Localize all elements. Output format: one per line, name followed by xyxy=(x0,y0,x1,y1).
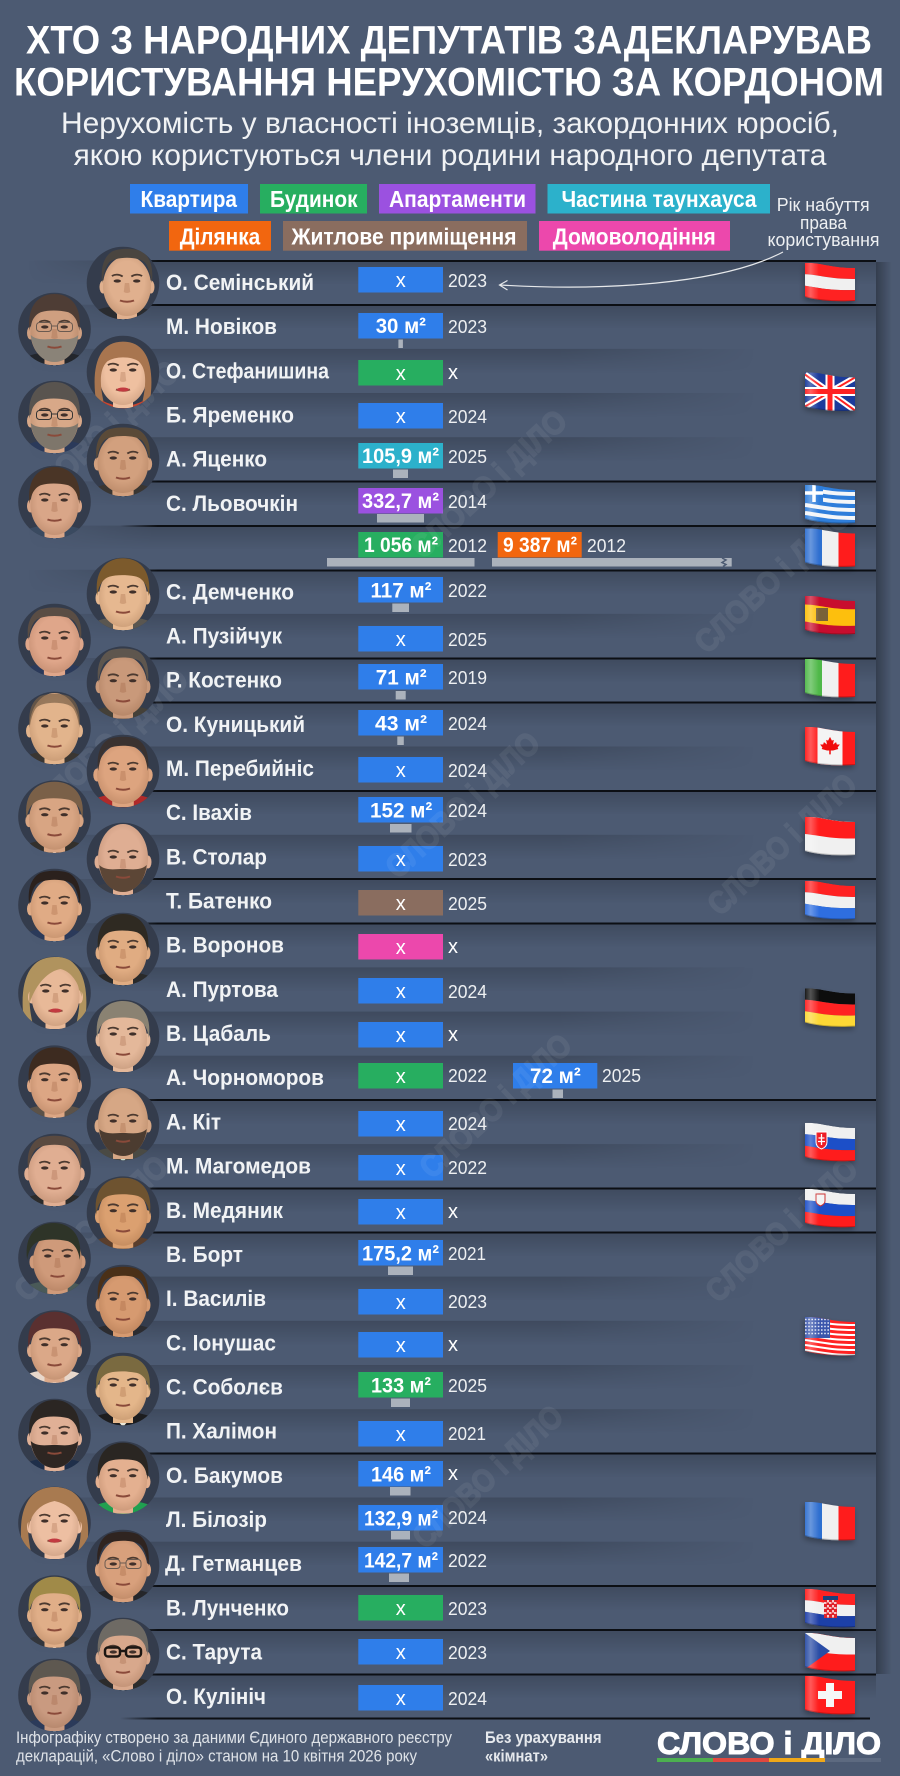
row: В. Медяник: х xyxy=(448,1201,458,1223)
row: С. Льовочкін xyxy=(166,488,487,522)
annotation: year of acquiring the right of use: права xyxy=(800,212,848,233)
portrait: Василів xyxy=(86,1264,160,1338)
portrait: Пузійчук xyxy=(18,604,91,676)
row: П. Халімон xyxy=(166,1419,486,1446)
row: П. Халімон: х xyxy=(396,1424,406,1446)
watermarks: СЛОВО і ДІЛО xyxy=(405,1398,570,1555)
row: М. Перебийніс: М. Перебийніс xyxy=(166,756,314,781)
row: В. Цабаль: х xyxy=(448,1024,458,1046)
row: В. Лунченко: х xyxy=(396,1598,406,1620)
row: С. Тарута: 2023 xyxy=(448,1642,487,1663)
row: Р. Костенко xyxy=(166,664,487,700)
flag: United States xyxy=(805,1317,855,1357)
row: А. Кіт xyxy=(166,1109,487,1136)
legend: апартаменти: Апартаменти xyxy=(389,186,526,212)
row: С. Іонушас: х xyxy=(448,1334,458,1356)
row: А. Пузійчук xyxy=(166,623,487,652)
row: О. Куницький: О. Куницький xyxy=(166,712,305,737)
row: В. Столар: х xyxy=(396,849,406,871)
row: Л. Білозір: Л. Білозір xyxy=(166,1507,267,1532)
legend: житлове приміщення: Житлове приміщення xyxy=(291,224,516,250)
flag: Canada xyxy=(805,727,855,767)
row: В. Лунченко xyxy=(166,1595,487,1620)
row: В. Воронов xyxy=(166,933,458,960)
watermarks: СЛОВО і ДІЛО xyxy=(18,353,186,513)
footer: note on rooms xyxy=(485,1729,602,1766)
row: І. Василів: х xyxy=(396,1292,406,1314)
row: Л. Білозір: 2024 xyxy=(448,1507,487,1528)
portrait: Лунченко xyxy=(18,1575,91,1648)
row: М. Магомедов: х xyxy=(396,1158,406,1180)
row: Б. Яременко xyxy=(166,402,487,428)
row: О. Кулініч: О. Кулініч xyxy=(166,1684,266,1709)
row: О. Стефанишина: х xyxy=(448,362,458,384)
portrait: Яременко xyxy=(18,380,91,454)
row: С. Льовочкін: 332,7 м² xyxy=(362,489,439,513)
flag: Croatia xyxy=(805,1589,855,1629)
row: Д. Гетманцев xyxy=(165,1547,487,1582)
flag: Czechia xyxy=(805,1633,855,1673)
row: Б. Яременко: х xyxy=(396,406,406,428)
row: С. Івахів: С. Івахів xyxy=(166,800,252,825)
row: С. Івахів: 152 м² xyxy=(370,798,432,822)
row: А. Пуртова: 2024 xyxy=(448,981,487,1002)
row: В. Столар: 2023 xyxy=(448,849,487,870)
flag: Slovenia xyxy=(805,1189,855,1229)
flag: United Kingdom xyxy=(805,372,855,412)
row: О. Куницький: 2024 xyxy=(448,713,487,734)
row: Л. Білозір xyxy=(166,1505,487,1540)
portrait: Семінський xyxy=(86,246,160,320)
row: М. Перебийніс: 2024 xyxy=(448,760,487,781)
row: О. Стефанишина: О. Стефанишина xyxy=(166,358,330,383)
subtitle: Нерухомість у власності іноземців, закордонних юросіб, xyxy=(61,107,839,140)
flag: Italy xyxy=(805,659,855,699)
row: С. Тарута xyxy=(166,1639,487,1665)
portrait: Батенко xyxy=(18,868,91,942)
footer: source note xyxy=(16,1729,453,1766)
portrait: Цабаль xyxy=(87,1000,159,1072)
watermarks: СЛОВО і ДІЛО xyxy=(698,1150,865,1309)
row: А. Пузійчук: х xyxy=(396,629,406,651)
row: С. Льовочкін: С. Льовочкін xyxy=(166,491,298,516)
row: В. Воронов: х xyxy=(396,937,406,959)
row: В. Борт: 175,2 м² xyxy=(362,1242,439,1266)
portrait: Перебийніс xyxy=(86,734,160,808)
row: С. Івахів: 2024 xyxy=(448,800,487,821)
portrait: Демченко xyxy=(86,558,160,630)
portrait: Соболєв xyxy=(86,1352,160,1426)
row: А. Яценко xyxy=(166,443,487,478)
portrait: Пуртова xyxy=(18,957,91,1029)
portrait: Стефанишина xyxy=(87,336,159,412)
flag: Slovakia xyxy=(805,1123,855,1163)
row: С. Демченко xyxy=(166,577,487,612)
portrait: Кіт xyxy=(86,1088,160,1160)
row: В. Медяник: В. Медяник xyxy=(166,1198,284,1223)
annotation: year of acquiring the right of use: користування xyxy=(768,229,880,250)
flag: Austria xyxy=(805,263,855,303)
row: С. Тарута: х xyxy=(396,1642,406,1664)
row: М. Перебийніс: х xyxy=(396,760,406,782)
portraits xyxy=(14,247,163,1735)
row: А. Кіт: х xyxy=(396,1114,406,1136)
row: О. Бакумов: О. Бакумов xyxy=(166,1463,283,1488)
row: В. Борт: В. Борт xyxy=(166,1242,243,1267)
row: Б. Яременко: Б. Яременко xyxy=(166,402,294,428)
row: Р. Костенко: Р. Костенко xyxy=(166,668,282,693)
row: О. Бакумов: х xyxy=(448,1463,458,1485)
portrait: Бакумов xyxy=(86,1441,160,1514)
subtitle: якою користуються члени родини народного депутата xyxy=(74,139,827,172)
row: С. Іонушас xyxy=(166,1330,458,1358)
row: Б. Яременко: 2024 xyxy=(448,406,487,427)
portrait: Білозір xyxy=(18,1487,91,1559)
watermarks: СЛОВО і ДІЛО xyxy=(7,1148,175,1308)
row: П. Халімон: 2021 xyxy=(448,1423,486,1444)
row: А. Чорноморов: х xyxy=(396,1066,406,1088)
row: В. Цабаль: В. Цабаль xyxy=(166,1021,271,1046)
watermarks xyxy=(7,353,865,1555)
row: М. Новіков: 30 м² xyxy=(376,314,426,338)
row: А. Пузійчук: 2025 xyxy=(448,629,487,650)
row: О. Куницький xyxy=(166,710,487,745)
row: В. Столар: В. Столар xyxy=(166,844,267,869)
row: Д. Гетманцев: Д. Гетманцев xyxy=(165,1551,302,1576)
row: О. Семінський: х xyxy=(396,270,406,292)
row: О. Семінський xyxy=(166,267,487,295)
row: А. Чорноморов: А. Чорноморов xyxy=(166,1065,324,1090)
row: С. Демченко: 117 м² xyxy=(370,578,432,602)
portrait: Столар xyxy=(86,822,160,896)
portrait: Гетманцев xyxy=(86,1530,160,1602)
row: А. Яценко: А. Яценко xyxy=(166,447,267,472)
row: С. Соболєв: С. Соболєв xyxy=(166,1374,283,1400)
row: О. Кулініч: х xyxy=(396,1688,406,1710)
row: О. Стефанишина xyxy=(166,358,458,386)
portrait: Новіков xyxy=(18,292,91,366)
row: О. Бакумов: 146 м² xyxy=(371,1462,431,1486)
flag: Germany xyxy=(805,988,855,1028)
flag: France xyxy=(805,1502,855,1542)
logo: Слово і діло: СЛОВО і ДІЛО xyxy=(657,1725,881,1761)
row: С. Демченко: 2022 xyxy=(448,580,487,601)
row: О. Семінський: О. Семінський xyxy=(166,270,314,295)
watermarks: СЛОВО і ДІЛО xyxy=(27,661,195,821)
row: В. Медяник xyxy=(166,1198,458,1224)
arrow: annotation to year xyxy=(500,252,783,290)
watermarks: СЛОВО і ДІЛО xyxy=(687,497,858,660)
portrait: Костенко xyxy=(86,646,160,719)
portrait: Тарута xyxy=(86,1618,160,1690)
row: В. Борт: 2021 xyxy=(448,1243,486,1264)
row: А. Пуртова xyxy=(166,977,487,1004)
row: М. Новіков: М. Новіков xyxy=(166,314,277,339)
row: Л. Білозір: 132,9 м² xyxy=(364,1506,438,1530)
subtitle xyxy=(61,107,839,172)
footer: note on rooms: Без урахування xyxy=(485,1729,602,1747)
row: С. Льовочкін, land and house in France xyxy=(327,532,732,566)
row: В. Лунченко: 2023 xyxy=(448,1598,487,1619)
row: А. Яценко: 2025 xyxy=(448,446,487,467)
portrait: Халімон xyxy=(18,1398,91,1472)
row: А. Яценко: 105,9 м² xyxy=(362,444,439,468)
row: А. Кіт: А. Кіт xyxy=(166,1109,221,1134)
portrait: Яценко xyxy=(86,424,160,496)
row: М. Новіков xyxy=(166,313,487,348)
row: В. Борт xyxy=(166,1240,486,1275)
annotation: year of acquiring the right of use: Рік набуття xyxy=(777,194,870,215)
row: В. Цабаль xyxy=(166,1021,458,1048)
watermarks: СЛОВО і ДІЛО xyxy=(403,402,574,565)
legend xyxy=(130,184,770,251)
row: В. Медяник: х xyxy=(396,1202,406,1224)
row: О. Бакумов xyxy=(166,1461,458,1496)
row: О. Семінський: 2023 xyxy=(448,270,487,291)
row: С. Соболєв xyxy=(166,1372,487,1407)
row: О. Стефанишина: х xyxy=(396,363,406,385)
legend: ділянка: Ділянка xyxy=(180,224,261,250)
row: С. Соболєв: 2025 xyxy=(448,1375,487,1396)
row: Р. Костенко: 2019 xyxy=(448,667,487,688)
row: А. Чорноморов: 72 м² xyxy=(530,1064,581,1088)
footer: note on rooms: «кімнат» xyxy=(485,1748,548,1766)
watermarks: СЛОВО і ДІЛО xyxy=(378,724,547,885)
row: С. Льовочкін, land and house in France: 9 387 м² xyxy=(503,533,577,557)
row: О. Кулініч xyxy=(166,1684,487,1710)
legend: частина таунхауса: Частина таунхауса xyxy=(562,186,757,212)
flag: Spain xyxy=(805,596,855,636)
portrait: Воронов xyxy=(86,912,160,986)
row: С. Івахів xyxy=(166,797,487,832)
row: С. Льовочкін, land and house in France: 2012 xyxy=(587,535,626,556)
row: С. Демченко: С. Демченко xyxy=(166,579,294,604)
legend: домоволодіння: Домоволодіння xyxy=(553,224,716,250)
flag: France xyxy=(805,528,855,568)
row: А. Пуртова: А. Пуртова xyxy=(166,977,279,1002)
row: І. Василів xyxy=(166,1286,487,1314)
row: А. Кіт: 2024 xyxy=(448,1113,487,1134)
flag: Greece xyxy=(805,485,855,525)
row: О. Кулініч: 2024 xyxy=(448,1688,487,1709)
portrait: Магомедов xyxy=(18,1134,91,1206)
row: В. Столар xyxy=(166,844,487,872)
row: А. Чорноморов: 2022 xyxy=(448,1065,487,1086)
row: Д. Гетманцев: 142,7 м² xyxy=(364,1548,438,1572)
portrait: Куницький xyxy=(18,692,91,764)
flag: Monaco / Indonesia xyxy=(805,817,855,857)
row: І. Василів: 2023 xyxy=(448,1291,487,1312)
portrait: Івахів xyxy=(18,780,91,853)
row: С. Тарута: С. Тарута xyxy=(166,1640,263,1665)
portrait: Льовочкін xyxy=(18,466,91,538)
watermarks: СЛОВО і ДІЛО xyxy=(700,766,864,922)
legend: будинок: Будинок xyxy=(270,186,358,212)
flags xyxy=(805,263,855,1716)
row: М. Новіков: 2023 xyxy=(448,316,487,337)
watermarks: СЛОВО і ДІЛО xyxy=(412,1026,579,1185)
row: С. Льовочкін, land and house in France: 2012 xyxy=(448,535,487,556)
table of deputies xyxy=(165,267,732,1710)
row: Д. Гетманцев: 2022 xyxy=(448,1550,487,1571)
portrait: Медяник xyxy=(86,1176,160,1249)
portrait: Кулініч xyxy=(18,1658,91,1732)
row: О. Куницький: 43 м² xyxy=(375,712,427,736)
row: А. Пузійчук: А. Пузійчук xyxy=(166,623,283,648)
row: В. Цабаль: х xyxy=(396,1025,406,1047)
row: С. Іонушас: х xyxy=(396,1335,406,1357)
row: С. Льовочкін: 2014 xyxy=(448,491,487,512)
portrait: Іонушас xyxy=(18,1310,91,1383)
row: Т. Батенко: Т. Батенко xyxy=(166,888,272,914)
row: Т. Батенко xyxy=(166,888,487,916)
row: М. Магомедов: М. Магомедов xyxy=(166,1154,311,1179)
row: П. Халімон: П. Халімон xyxy=(166,1419,277,1444)
row: С. Соболєв: 133 м² xyxy=(371,1374,431,1398)
row: М. Магомедов xyxy=(166,1154,487,1180)
row: А. Чорноморов xyxy=(166,1063,641,1098)
flag: Switzerland xyxy=(805,1676,855,1716)
row: І. Василів: І. Василів xyxy=(166,1286,266,1311)
row: С. Льовочкін, land and house in France: 1 056 м² xyxy=(364,533,438,557)
row: В. Лунченко: В. Лунченко xyxy=(166,1595,289,1620)
row: Т. Батенко: х xyxy=(396,893,406,915)
annotation: year of acquiring the right of use xyxy=(768,194,880,250)
footer: source note: Інфографіку створено за даними Єдиного державного реєстру xyxy=(16,1729,453,1747)
row: С. Іонушас: С. Іонушас xyxy=(166,1330,276,1355)
row: М. Магомедов: 2022 xyxy=(448,1157,487,1178)
row: Р. Костенко: 71 м² xyxy=(376,666,427,690)
flag: Netherlands xyxy=(805,881,855,921)
row: А. Чорноморов: 2025 xyxy=(602,1065,641,1086)
row: А. Пуртова: х xyxy=(396,981,406,1003)
row: В. Воронов: х xyxy=(448,936,458,958)
row: Т. Батенко: 2025 xyxy=(448,893,487,914)
legend: квартира: Квартира xyxy=(140,186,238,212)
row: М. Перебийніс xyxy=(166,756,487,782)
footer: source note: декларацій, «Слово і діло» станом на 10 квітня 2026 року xyxy=(16,1748,418,1766)
portrait: Чорноморов xyxy=(18,1045,91,1118)
row: В. Воронов: В. Воронов xyxy=(166,933,284,958)
portrait: Борт xyxy=(18,1222,91,1294)
title xyxy=(14,18,884,104)
